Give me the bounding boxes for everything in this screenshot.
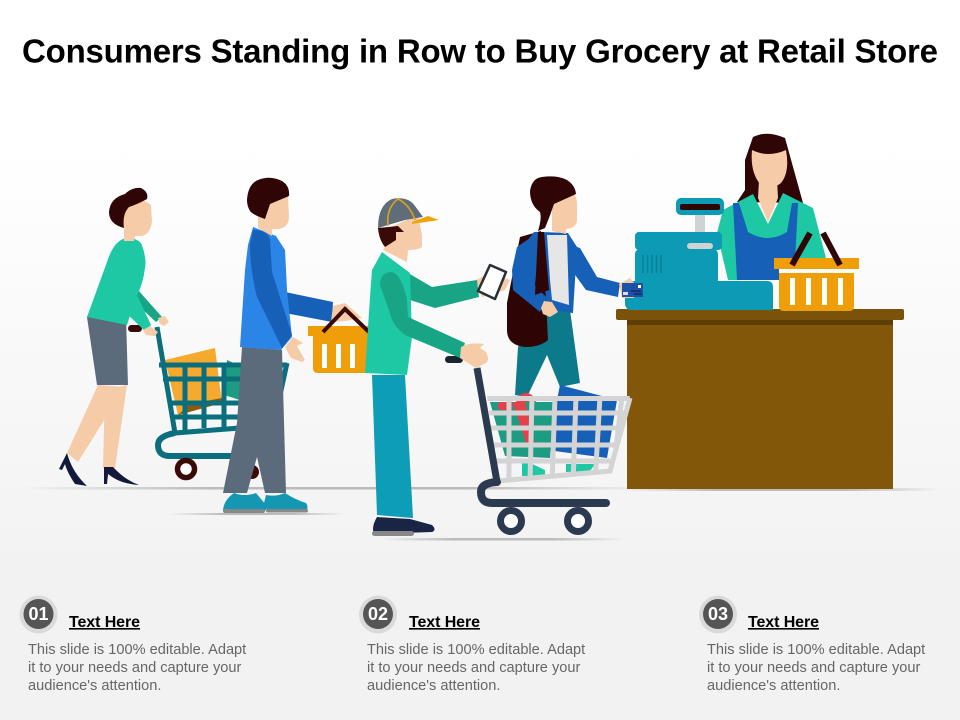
cart grip (445, 356, 463, 363)
woman 1 arm (104, 280, 151, 332)
illustration: customer paying by card (507, 176, 643, 476)
basket handle (323, 309, 369, 332)
man 3 vest (365, 252, 412, 375)
description 2: This slide is 100% editable. Adapt (367, 642, 585, 658)
cashier top (717, 193, 827, 280)
baseball cap (378, 198, 439, 228)
cart base (481, 482, 606, 503)
man 2 hair (247, 178, 289, 219)
title: Consumers Standing in Row to Buy Grocery at Retail Store (22, 32, 938, 70)
man 2 shoes (223, 493, 308, 513)
cashier face (752, 150, 787, 188)
ground shadows (20, 487, 940, 540)
number badge 02 (359, 596, 397, 634)
man 3 near sleeve (380, 272, 465, 358)
customer head (552, 192, 577, 234)
man 2 sleeve (250, 230, 292, 348)
item 1 (20, 596, 250, 694)
cash register (625, 198, 773, 310)
illustration: second shopper with basket (223, 178, 370, 513)
number badge 03 (699, 596, 737, 634)
description 3: it to your needs and capture your (707, 660, 921, 676)
cart pole (477, 368, 497, 482)
man 2 sweater (240, 227, 292, 350)
woman 1 hair (109, 188, 147, 228)
customer hand (541, 301, 558, 317)
item 2 (359, 596, 589, 694)
woman 1 far arm (127, 242, 162, 322)
cashier apron (733, 203, 798, 280)
woman 1 top (87, 238, 146, 325)
cart contents: box and bag (165, 348, 245, 415)
illustration: cashier and register counter (616, 134, 904, 489)
man 3 hair (378, 226, 404, 247)
credit card (622, 283, 643, 297)
number badge 02: 02 (368, 604, 388, 624)
heading 2: Text Here (409, 614, 480, 631)
description 1: This slide is 100% editable. Adapt (28, 642, 246, 658)
man 2 pants (223, 347, 286, 493)
customer shirt (547, 235, 569, 305)
customer paying hand (619, 278, 634, 298)
counter (616, 309, 904, 489)
man 3 far arm (408, 273, 479, 308)
man 3 neck and head (383, 215, 422, 262)
orange basket (308, 326, 370, 373)
customer bag (507, 231, 548, 347)
illustration: first shopper with teal cart (59, 188, 287, 486)
description 2: audience's attention. (367, 678, 500, 694)
customer far arm (571, 245, 620, 297)
cart wheel (178, 460, 194, 478)
woman 1 skirt (87, 317, 128, 385)
customer strap (535, 232, 549, 295)
woman 1 legs (67, 385, 125, 462)
illustration: shopper with cap and cart (365, 198, 640, 536)
number badge 01: 01 (28, 604, 49, 624)
cart wheels (500, 510, 522, 532)
customer hair (530, 176, 576, 231)
cart contents (490, 385, 617, 458)
teal shopping cart (157, 327, 287, 456)
description 2: it to your needs and capture your (367, 660, 581, 676)
grey cart basket (480, 396, 640, 484)
man 3 hand on cart (460, 343, 488, 368)
man 2 far arm (285, 292, 333, 322)
customer legs (515, 310, 580, 397)
man 2 head (256, 195, 289, 236)
cashier hair (737, 134, 803, 203)
man 2 hand (285, 337, 305, 362)
description 3: This slide is 100% editable. Adapt (707, 642, 925, 658)
customer jacket (525, 232, 577, 313)
counter basket (774, 233, 859, 311)
cashier neck (758, 180, 778, 222)
customer near arm (512, 238, 547, 312)
woman 1 head (121, 199, 152, 241)
man 2 hand on basket (331, 303, 362, 322)
man 3 shoes (372, 517, 434, 536)
customer shoes (522, 463, 595, 476)
number badge 03: 03 (708, 604, 728, 624)
woman 1 hands (143, 316, 169, 336)
description 1: it to your needs and capture your (28, 660, 242, 676)
phone hand (476, 273, 510, 297)
description 3: audience's attention. (707, 678, 840, 694)
item 3 (699, 596, 929, 694)
woman 1 heels (59, 453, 87, 486)
description 1: audience's attention. (28, 678, 161, 694)
heading 1: Text Here (69, 614, 140, 631)
man 3 pants (372, 375, 413, 518)
phone (478, 265, 506, 299)
number badge 01 (20, 596, 58, 634)
heading 3: Text Here (748, 614, 819, 631)
cart grip (128, 325, 142, 332)
